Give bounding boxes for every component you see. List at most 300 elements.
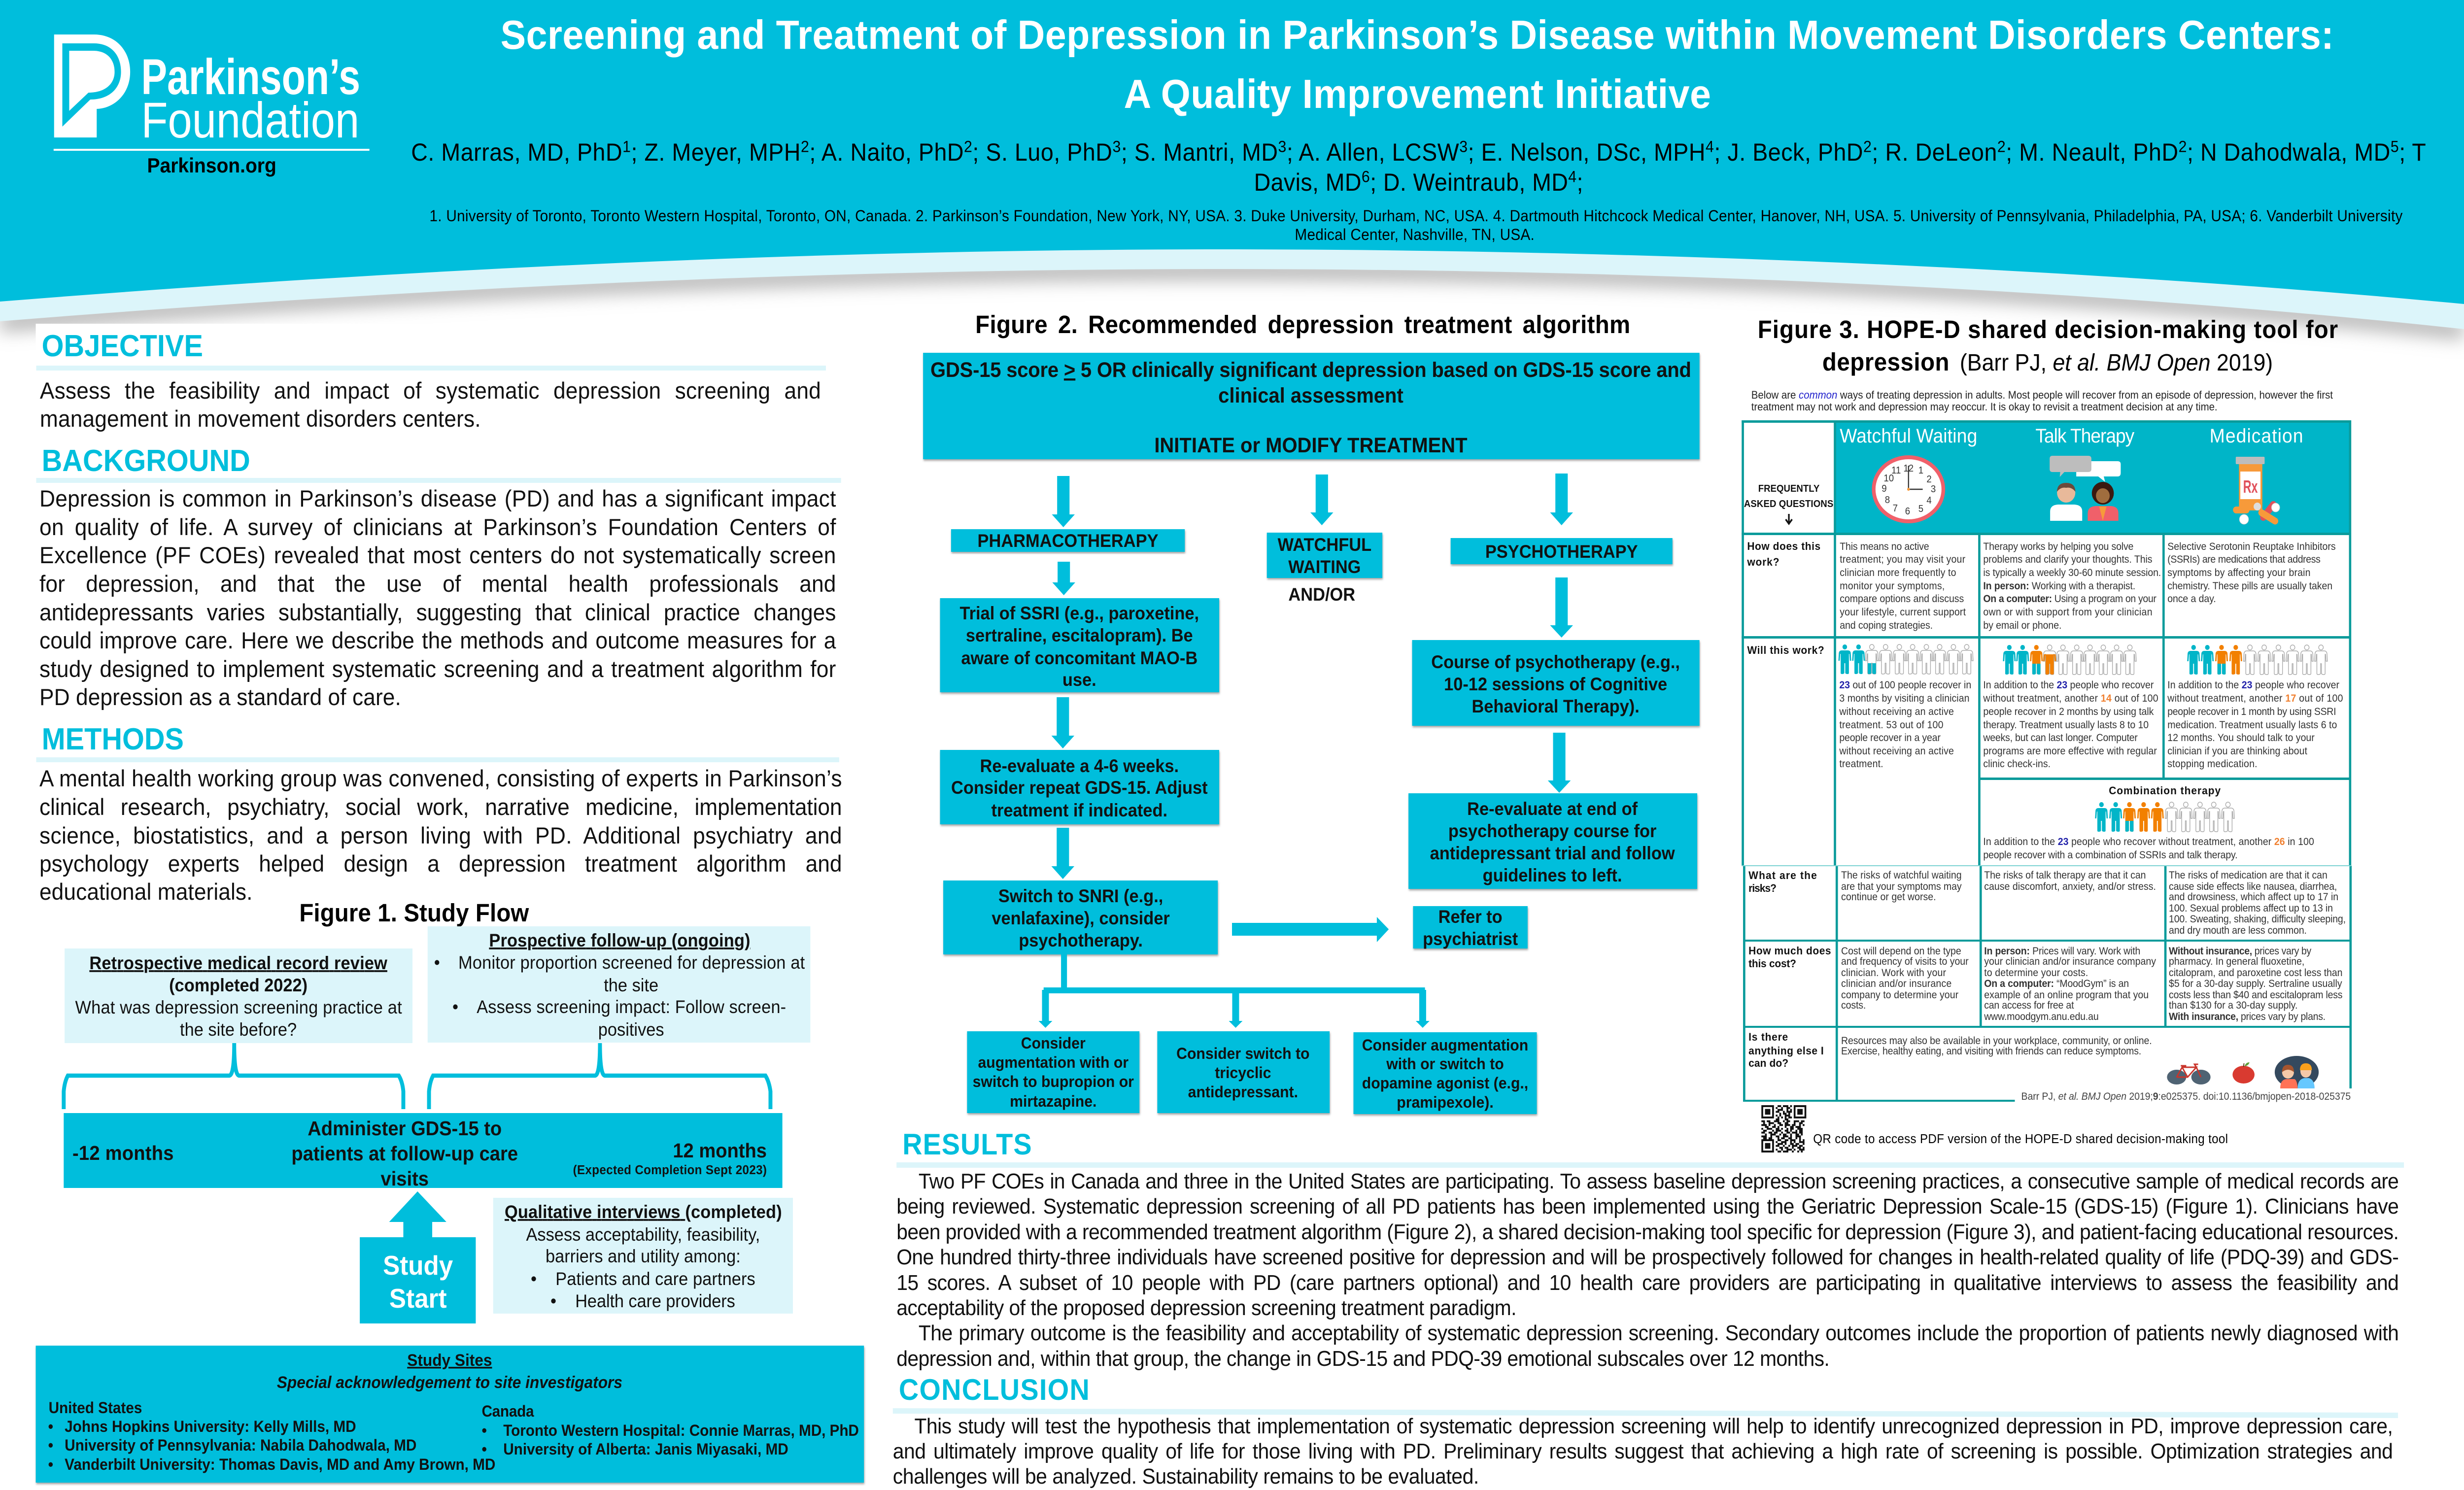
icon: clock: 1 <box>1918 465 1923 476</box>
medication text: chemistry. These pills are usually taken <box>2167 580 2332 592</box>
row: how much does this cost <box>1748 944 2343 1022</box>
resources text: Exercise, healthy eating, and visiting with friends can reduce symptoms. <box>1841 1046 2141 1057</box>
icon: two friends <box>2275 1056 2319 1088</box>
arrows: from criterion to the three pathways <box>1052 474 1573 527</box>
box: prospective follow-up: Prospective follow-up (ongoing) <box>489 930 751 950</box>
talk therapy outcomes: In addition to the 23 people who recover <box>1983 679 2154 691</box>
talk therapy outcomes: clinic check-ins. <box>1983 758 2051 770</box>
results text: being reviewed. Systematic depression screening of all PD patients has been implemented using the Geriatric Depression Scale-15 (GDS-15) (Figure 1). Clinicians have <box>896 1195 2399 1219</box>
resources text <box>1841 1035 2152 1057</box>
background text: PD depression as a standard of care. <box>39 684 401 710</box>
watchful waiting outcomes <box>1839 679 1971 770</box>
background text: antidepressants varies substantially, suggesting that clinical practice changes <box>39 599 836 625</box>
box: re-evaluate at 4-6 weeks: treatment if indicated. <box>992 800 1167 820</box>
methods text: psychology experts helped design a depression treatment algorithm and <box>39 850 842 877</box>
conclusion text: challenges will be analyzed. Sustainability remains to be evaluated. <box>893 1465 1479 1489</box>
bracket: prospective period <box>429 1043 770 1109</box>
results text: acceptability of the proposed depression screening treatment paradigm. <box>896 1296 1517 1320</box>
citation: Barr PJ, et al. BMJ Open 2019;9:e025375. doi:10.1136/bmjopen-2018-025375 <box>2021 1091 2351 1102</box>
box: re-evaluate at 4-6 weeks <box>940 750 1219 824</box>
figure 1: study flow <box>64 899 810 1323</box>
methods text: clinical research, psychiatry, social work, narrative medicine, implementation <box>39 794 842 820</box>
background text <box>39 485 836 710</box>
watchful waiting cost: costs. <box>1841 1000 1866 1011</box>
medication cost <box>2169 946 2343 1022</box>
box: watchful waiting: WAITING <box>1288 557 1361 577</box>
section: background <box>36 443 841 710</box>
logo: Parkinson's Foundation <box>54 34 370 177</box>
label: and/or: AND/OR <box>1288 584 1355 605</box>
medication risks: cause side effects like nausea, diarrhea, <box>2169 881 2337 892</box>
icon: clock <box>1874 457 1943 521</box>
box: consider augmentation: augmentation with or <box>978 1053 1129 1071</box>
row label <box>1748 1030 1824 1069</box>
watchful waiting cost: clinician and/or insurance <box>1841 978 1951 989</box>
results text <box>896 1170 2399 1371</box>
talk therapy outcomes: weeks, but can last longer. Computer <box>1983 732 2138 744</box>
arrows: branching to three options <box>1039 954 1430 1028</box>
watchful waiting risks <box>1841 870 1962 903</box>
white backing behind left column <box>36 324 842 373</box>
figure 2: treatment algorithm <box>923 310 1700 1114</box>
box: retrospective medical record review: Retrospective medical record review <box>89 953 387 973</box>
box: study start: Study <box>383 1251 453 1281</box>
medication outcomes: clinician if you are thinking about <box>2167 745 2307 757</box>
bracket: retrospective period <box>64 1043 403 1109</box>
methods text: science, biostatistics, and a person living with PD. Additional psychiatry and <box>39 822 842 848</box>
title: A Quality Improvement Initiative <box>1124 70 1711 117</box>
box: course of psychotherapy: Behavioral Therapy). <box>1472 696 1640 716</box>
column headers: Talk Therapy <box>2035 425 2135 447</box>
medication cost: than $130 for a 30-day supply. <box>2169 1000 2297 1011</box>
arrow: study start up to timeline <box>389 1191 446 1239</box>
row label: What are the <box>1748 869 1817 881</box>
table grid <box>1742 420 2352 1102</box>
list: United States sites: Vanderbilt University: Thomas Davis, MD and Amy Brown, MD <box>65 1456 495 1473</box>
watchful waiting text: treatment; you may visit your <box>1840 554 1965 565</box>
box: re-evaluate at 4-6 weeks: Consider repeat GDS-15. Adjust <box>951 778 1208 798</box>
icon: bicycle <box>2167 1064 2211 1084</box>
methods text <box>39 765 842 905</box>
watchful waiting outcomes: 23 out of 100 people recover in <box>1839 679 1971 691</box>
box: consider dopamine agonist: Consider augmentation <box>1362 1036 1528 1054</box>
figure 1 heading: Figure 1. Study Flow <box>299 899 529 927</box>
section: results <box>896 1128 2404 1371</box>
panel: study sites <box>36 1346 864 1483</box>
talk therapy cost: to determine your costs. <box>1984 967 2088 979</box>
box: study start: Start <box>389 1284 447 1314</box>
timeline bar: 12 months <box>673 1140 767 1162</box>
row label: How much does <box>1748 944 1831 957</box>
box: watchful waiting: WATCHFUL <box>1278 535 1371 555</box>
intro text <box>1751 389 2333 413</box>
row: how does this work <box>1746 540 2336 631</box>
icon: talk therapy people <box>2050 456 2121 521</box>
intro text: treatment may not work and depression may reoccur. It is okay to revisit a treatment decision at any time. <box>1751 401 2218 413</box>
row: what are the risks <box>1748 869 2346 936</box>
medication outcomes: without treatment, another 17 out of 100 <box>2167 693 2343 704</box>
box: retrospective medical record review: What was depression screening practice at <box>75 997 402 1017</box>
medication risks: 100. Sweating, shaking, difficulty sleeping, <box>2169 914 2346 925</box>
box: re-evaluate at end of psychotherapy: antidepressant trial and follow <box>1430 843 1675 863</box>
timeline bar: -12 months <box>72 1142 173 1164</box>
list: United States sites: United States <box>49 1399 142 1417</box>
background text: could improve care. Here we describe the methods and outcome measures for a <box>39 627 836 653</box>
background text: study designed to implement systematic screening and a treatment algorithm for <box>39 656 836 682</box>
medication risks: 100. Sexual problems affect up to 13 in <box>2169 903 2333 914</box>
column headers <box>1840 425 2303 447</box>
arrow: to SNRI switch <box>1052 828 1074 879</box>
box: re-evaluate at end of psychotherapy: guidelines to left. <box>1483 865 1622 885</box>
panel: study sites: Special acknowledgement to site investigators <box>277 1373 622 1391</box>
icon: clock: 4 <box>1926 495 1932 506</box>
background text: for depression, and that the use of mental health professionals and <box>39 571 836 597</box>
timeline bar: patients at follow-up care <box>291 1143 518 1165</box>
background text: on quality of life. A survey of clinicians at Parkinson’s Foundation Centers of <box>39 514 836 540</box>
watchful waiting text: compare options and discuss <box>1840 593 1964 605</box>
watchful waiting outcomes: treatment. 53 out of 100 <box>1839 719 1943 731</box>
pictogram: medication <box>2187 645 2327 675</box>
talk therapy text: own or with support from your clinician <box>1983 607 2153 618</box>
medication cost: With insurance, prices vary by plans. <box>2169 1011 2326 1022</box>
results text: One hundred thirty-three individuals have screened positive for depression and will be prospectively followed for changes in health-related quality of life (PDQ-39) and GDS- <box>896 1246 2399 1269</box>
box: prospective follow-up: Monitor proportion screened for depression at <box>458 952 805 973</box>
icon: clock: 7 <box>1893 503 1898 514</box>
icon: clock: 11 <box>1891 465 1901 476</box>
talk therapy text <box>1983 541 2161 631</box>
box: qualitative interviews: Assess acceptability, feasibility, <box>526 1224 760 1245</box>
authors <box>411 137 2426 196</box>
intro text: Below are common ways of treating depression in adults. Most people will recover from an episode of depression, however the first <box>1751 389 2333 401</box>
row label <box>1746 540 1820 568</box>
talk therapy outcomes <box>1983 679 2158 770</box>
talk therapy outcomes: programs are more effective with regular <box>1983 745 2157 757</box>
list: Canada sites: Toronto Western Hospital: Connie Marras, MD, PhD <box>503 1422 859 1439</box>
list: United States sites: • <box>48 1418 53 1435</box>
icon: P mark <box>54 34 130 137</box>
watchful waiting outcomes: without receiving an active <box>1839 706 1954 717</box>
box: psychotherapy <box>1451 538 1673 564</box>
arrow: to re-evaluate <box>1052 697 1074 748</box>
box: qualitative interviews: Patients and care partners <box>555 1269 755 1289</box>
box: re-evaluate at end of psychotherapy: Re-evaluate at end of <box>1467 799 1638 819</box>
box: refer to psychiatrist <box>1413 906 1528 949</box>
box: pharmacotherapy <box>951 529 1185 552</box>
talk therapy text: Therapy works by helping you solve <box>1983 541 2133 552</box>
timeline bar: visits <box>380 1168 429 1190</box>
box: consider dopamine agonist: pramipexole). <box>1397 1093 1494 1111</box>
medication cost: costs less than $40 and escitalopram less <box>2169 989 2343 1001</box>
row label: can do? <box>1748 1056 1788 1069</box>
list: United States sites: • <box>48 1436 53 1454</box>
box: consider tricyclic: antidepressant. <box>1188 1083 1298 1101</box>
watchful waiting outcomes: without receiving an active <box>1839 745 1954 757</box>
watchful waiting risks: continue or get worse. <box>1841 891 1936 903</box>
box: trial of SSRI: Trial of SSRI (e.g., paroxetine, <box>960 603 1199 623</box>
medication outcomes <box>2167 679 2343 770</box>
methods text: A mental health working group was convened, consisting of experts in Parkinson’s <box>39 765 842 791</box>
medication cost: citalopram, and paroxetine cost less than <box>2169 967 2343 979</box>
box: consider tricyclic <box>1157 1031 1330 1113</box>
box: qualitative interviews: • <box>531 1269 537 1289</box>
figure 3 heading: Figure 3. HOPE-D shared decision-making tool for <box>1758 315 2338 343</box>
timeline bar: (Expected Completion Sept 2023) <box>573 1163 767 1177</box>
watchful waiting risks: are that your symptoms may <box>1841 881 1962 892</box>
row label <box>1748 869 1817 894</box>
medication outcomes: 12 months. You should talk to your <box>2167 732 2315 744</box>
row label: this cost? <box>1748 957 1796 970</box>
box: GDS-15 criterion: INITIATE or MODIFY TREATMENT <box>1154 433 1468 457</box>
box: qualitative interviews <box>493 1198 793 1314</box>
arrow: to SSRI trial <box>1052 562 1075 595</box>
list: Canada sites: • <box>481 1440 487 1458</box>
background text: Excellence (PF COEs) revealed that most centers do not systematically screen <box>39 542 836 568</box>
logo: Parkinson's Foundation: Parkinson’s <box>141 49 360 105</box>
watchful waiting cost: company to determine your <box>1841 989 1958 1001</box>
talk therapy outcomes: people recover in 2 months by using talk <box>1983 706 2154 717</box>
list: United States sites: • <box>48 1456 53 1473</box>
watchful waiting risks: The risks of watchful waiting <box>1841 870 1962 881</box>
talk therapy cost: example of an online program that you <box>1984 989 2149 1001</box>
box: switch to SNRI: Switch to SNRI (e.g., <box>998 886 1163 906</box>
watchful waiting cost <box>1841 946 1969 1011</box>
figure 2 heading: Figure 2. Recommended depression treatment algorithm <box>975 310 1630 339</box>
figure 3 heading: (Barr PJ, et al. BMJ Open 2019) <box>1960 349 2273 375</box>
heading: results: RESULTS <box>902 1128 1032 1161</box>
authors: Davis, MD6; D. Weintraub, MD4; <box>1254 168 1583 196</box>
label: frequently asked questions <box>1744 483 1833 524</box>
results text: The primary outcome is the feasibility and acceptability of systematic depression screening. Secondary outcomes include the proportion of patients newly diagnosed with <box>919 1321 2399 1345</box>
section: objective <box>36 329 826 432</box>
box: qualitative interviews: Health care providers <box>575 1291 735 1311</box>
combination therapy <box>1983 784 2314 861</box>
talk therapy text: On a computer: Using a program on your <box>1983 593 2156 605</box>
box: prospective follow-up: Assess screening impact: Follow screen- <box>477 997 786 1017</box>
icon: clock: 2 <box>1926 474 1932 485</box>
box: GDS-15 criterion: clinical assessment <box>1218 383 1403 407</box>
box: psychotherapy: PSYCHOTHERAPY <box>1485 542 1638 562</box>
box: consider augmentation: mirtazapine. <box>1010 1092 1096 1110</box>
box: consider tricyclic: tricyclic <box>1215 1064 1271 1082</box>
medication cost: $5 for a 30-day supply. Sertraline usually <box>2169 978 2342 989</box>
box: consider tricyclic: Consider switch to <box>1176 1045 1309 1062</box>
icon: clock: 3 <box>1931 484 1936 495</box>
authors: C. Marras, MD, PhD1; Z. Meyer, MPH2; A. Naito, PhD2; S. Luo, PhD3; S. Mantri, MD3; A. Allen, LCSW3; E. Nelson, DSc, MPH4; J. Beck, PhD2; R. DeLeon2; M. Neault, PhD2; N Dahodwala, MD5; T <box>411 137 2426 166</box>
talk therapy cost <box>1984 946 2156 1022</box>
box: qualitative interviews: Qualitative interviews (completed) <box>505 1202 782 1222</box>
results text: depression and, within that group, the change in GDS-15 and PDQ-39 emotional subscales over 12 months. <box>896 1347 1830 1371</box>
list: Canada sites: • <box>481 1422 487 1439</box>
box: qualitative interviews: • <box>550 1291 556 1311</box>
medication cost: Without insurance, prices vary by <box>2169 946 2312 957</box>
box: re-evaluate at end of psychotherapy: psychotherapy course for <box>1448 821 1656 841</box>
label: frequently asked questions: ASKED QUESTIONS <box>1744 499 1833 509</box>
box: course of psychotherapy: Course of psychotherapy (e.g., <box>1431 652 1680 672</box>
medication outcomes: stopping medication. <box>2167 758 2258 770</box>
box: prospective follow-up <box>428 926 810 1043</box>
box: course of psychotherapy <box>1412 640 1700 726</box>
watchful waiting text: clinician more frequently to <box>1840 567 1956 578</box>
results text: been provided with a recommended treatment algorithm (Figure 2), a shared decision-making tool specific for depression (Figure 3), and patient-facing educational resources. <box>896 1220 2399 1244</box>
figure 3 heading <box>1758 315 2338 376</box>
watchful waiting outcomes: people recover in a year <box>1839 732 1941 744</box>
medication text: once a day. <box>2167 593 2216 605</box>
box: prospective follow-up: positives <box>598 1019 664 1040</box>
watchful waiting cost: Cost will depend on the type <box>1841 946 1961 957</box>
timeline bar <box>64 1113 783 1190</box>
box: consider augmentation <box>967 1031 1139 1113</box>
box: prospective follow-up: • <box>452 997 458 1017</box>
figure 3: HOPE-D decision tool <box>1742 315 2352 1151</box>
talk therapy risks <box>1984 870 2156 892</box>
watchful waiting text: This means no active <box>1840 541 1929 552</box>
medication outcomes: people recover in 1 month by using SSRI <box>2167 706 2336 717</box>
box: retrospective medical record review: the site before? <box>180 1019 297 1040</box>
box: consider augmentation: switch to bupropion or <box>973 1073 1134 1090</box>
row: will this work <box>1747 643 2343 861</box>
box: refer to psychiatrist: Refer to <box>1438 907 1503 927</box>
box: trial of SSRI: aware of concomitant MAO-B <box>961 648 1198 668</box>
heading: conclusion: CONCLUSION <box>899 1374 1090 1406</box>
methods text: educational materials. <box>39 879 252 905</box>
box: consider augmentation: Consider <box>1021 1034 1086 1052</box>
affiliations <box>429 207 2403 243</box>
icon: clock: 8 <box>1885 495 1890 506</box>
box: trial of SSRI: sertraline, escitalopram). Be <box>966 625 1193 645</box>
resources text: Resources may also be available in your workplace, community, or online. <box>1841 1035 2152 1047</box>
heading: objective: OBJECTIVE <box>42 329 203 363</box>
talk therapy text: problems and clarify your thoughts. This <box>1983 554 2153 565</box>
box: retrospective medical record review <box>65 948 412 1043</box>
talk therapy risks: The risks of talk therapy are that it can <box>1984 870 2146 881</box>
QR code <box>1761 1106 1806 1151</box>
timeline bar: Administer GDS-15 to <box>308 1118 502 1140</box>
icon: apple <box>2232 1062 2255 1084</box>
talk therapy cost: can access for free at <box>1984 1000 2074 1011</box>
list: Canada sites <box>481 1402 859 1458</box>
watchful waiting cost: clinician. Work with your <box>1841 967 1946 979</box>
table header band <box>1835 422 2349 534</box>
icon: clock: 6 <box>1905 506 1910 517</box>
box: re-evaluate at 4-6 weeks: Re-evaluate a 4-6 weeks. <box>980 756 1179 776</box>
label: frequently asked questions: FREQUENTLY <box>1758 483 1819 494</box>
heading: background: BACKGROUND <box>42 443 250 477</box>
arrow: to course of psychotherapy <box>1550 577 1573 638</box>
header banner <box>0 0 2464 337</box>
arrow: to end-of-course evaluation <box>1548 733 1571 793</box>
combination therapy: Combination therapy <box>2109 784 2221 797</box>
watchful waiting text: and coping strategies. <box>1840 620 1933 631</box>
panel: study sites: Study Sites <box>407 1351 492 1369</box>
box: switch to SNRI: venlafaxine), consider <box>992 908 1170 928</box>
row label: Will this work? <box>1747 643 1824 656</box>
combination therapy: people recover with a combination of SSRIs and talk therapy. <box>1983 849 2238 861</box>
box: re-evaluate at end of psychotherapy <box>1408 793 1697 889</box>
list: Canada sites: Canada <box>481 1402 534 1420</box>
box: prospective follow-up: • <box>434 952 440 973</box>
watchful waiting text: your lifestyle, current support <box>1840 607 1966 618</box>
pictogram: watchful waiting <box>1838 644 1973 674</box>
column headers: Watchful Waiting <box>1840 425 1977 447</box>
medication outcomes: medication. Treatment usually lasts 6 to <box>2167 719 2337 731</box>
talk therapy outcomes: therapy. Treatment usually lasts 8 to 10 <box>1983 719 2149 731</box>
talk therapy text: by email or phone. <box>1983 620 2061 631</box>
medication risks: The risks of medication are that it can <box>2169 870 2327 881</box>
box: GDS-15 criterion <box>923 353 1700 459</box>
box: study start <box>360 1237 476 1323</box>
icon: clock: 5 <box>1918 504 1923 514</box>
row label: work? <box>1746 555 1779 568</box>
medication risks: and dry mouth are less common. <box>2169 925 2307 936</box>
medication cost: pharmacy. In general fluoxetine, <box>2169 956 2304 967</box>
box: GDS-15 criterion: GDS-15 score > 5 OR clinically significant depression based on GDS-15 score and <box>930 358 1691 381</box>
conclusion text: and ultimately improve quality of life for those living with PD. Preliminary results suggest that achieving a high rate of screening is possible. Optimization strategies and <box>893 1440 2393 1463</box>
watchful waiting text: monitor your symptoms, <box>1840 580 1945 592</box>
talk therapy text: is typically a weekly 30-60 minute session. <box>1983 567 2161 578</box>
icon: pill bottle <box>2233 457 2280 526</box>
combination therapy: In addition to the 23 people who recover without treatment, another 26 in 100 <box>1983 836 2314 847</box>
section: methods <box>36 722 842 905</box>
row label: Is there <box>1748 1030 1788 1043</box>
logo: Parkinson's Foundation: Foundation <box>141 92 359 148</box>
column headers: Medication <box>2210 425 2303 447</box>
talk therapy cost: In person: Prices will vary. Work with <box>1984 946 2140 957</box>
icon: clock: 10 <box>1883 473 1894 484</box>
title <box>501 11 2334 117</box>
title: Screening and Treatment of Depression in Parkinson’s Disease within Movement Disorders Centers: <box>501 11 2334 58</box>
medication text: (SSRIs) are medications that address <box>2167 554 2321 565</box>
icon: pill bottle: Rx <box>2243 477 2258 497</box>
box: switch to SNRI <box>943 880 1218 954</box>
affiliations: 1. University of Toronto, Toronto Western Hospital, Toronto, ON, Canada. 2. Parkinson’s Foundation, New York, NY, USA. 3. Duke University, Durham, NC, USA. 4. Dartmouth Hitchcock Medical Center, Hanover, NH, USA. 5. University of Pennsylvania, Philadelphia, PA, USA; 6. Vanderbilt University <box>429 207 2403 225</box>
box: consider dopamine agonist <box>1353 1032 1537 1114</box>
conclusion text <box>893 1415 2393 1489</box>
logo: Parkinson's Foundation: Parkinson.org <box>147 154 276 177</box>
heading: methods: METHODS <box>42 722 184 756</box>
results text: Two PF COEs in Canada and three in the United States are participating. To assess baseline depression screening practices, a consecutive sample of medical records are <box>919 1170 2399 1193</box>
row label: anything else I <box>1748 1044 1824 1057</box>
talk therapy risks: cause discomfort, anxiety, and/or stress. <box>1984 881 2156 892</box>
medication text: symptoms by affecting your brain <box>2167 567 2310 578</box>
figure 3 heading: depression <box>1822 348 1950 376</box>
conclusion text: This study will test the hypothesis that implementation of systematic depression screening will help to identify unrecognized depression in PD, improve depression care, <box>914 1415 2393 1438</box>
objective text: Assess the feasibility and impact of systematic depression screening and <box>40 377 821 404</box>
box: trial of SSRI <box>940 598 1219 692</box>
icon: clock: 9 <box>1882 483 1887 494</box>
pictogram: talk therapy <box>2003 645 2136 675</box>
box: trial of SSRI: use. <box>1062 670 1096 690</box>
objective text <box>40 377 821 432</box>
list: United States sites: University of Pennsylvania: Nabila Dahodwala, MD <box>65 1436 416 1454</box>
box: watchful waiting <box>1267 533 1382 578</box>
box: refer to psychiatrist: psychiatrist <box>1423 929 1518 949</box>
arrow: to psychiatrist referral <box>1232 917 1389 942</box>
list: United States sites <box>48 1399 495 1473</box>
box: prospective follow-up: the site <box>604 975 658 995</box>
box: consider dopamine agonist: dopamine agonist (e.g., <box>1362 1074 1528 1092</box>
talk therapy cost: www.moodgym.anu.edu.au <box>1984 1011 2099 1022</box>
section: conclusion <box>893 1374 2398 1489</box>
talk therapy text: In person: Working with a therapist. <box>1983 580 2135 592</box>
box: course of psychotherapy: 10-12 sessions of Cognitive <box>1444 674 1667 694</box>
list: Canada sites: University of Alberta: Janis Miyasaki, MD <box>503 1440 788 1458</box>
icon: clock: 12 <box>1903 463 1914 474</box>
box: switch to SNRI: psychotherapy. <box>1019 930 1143 950</box>
objective text: management in movement disorders centers. <box>40 406 481 432</box>
talk therapy cost: On a computer: “MoodGym” is an <box>1984 978 2129 989</box>
row: anything else <box>1748 1030 2152 1069</box>
row label: How does this <box>1747 540 1820 552</box>
